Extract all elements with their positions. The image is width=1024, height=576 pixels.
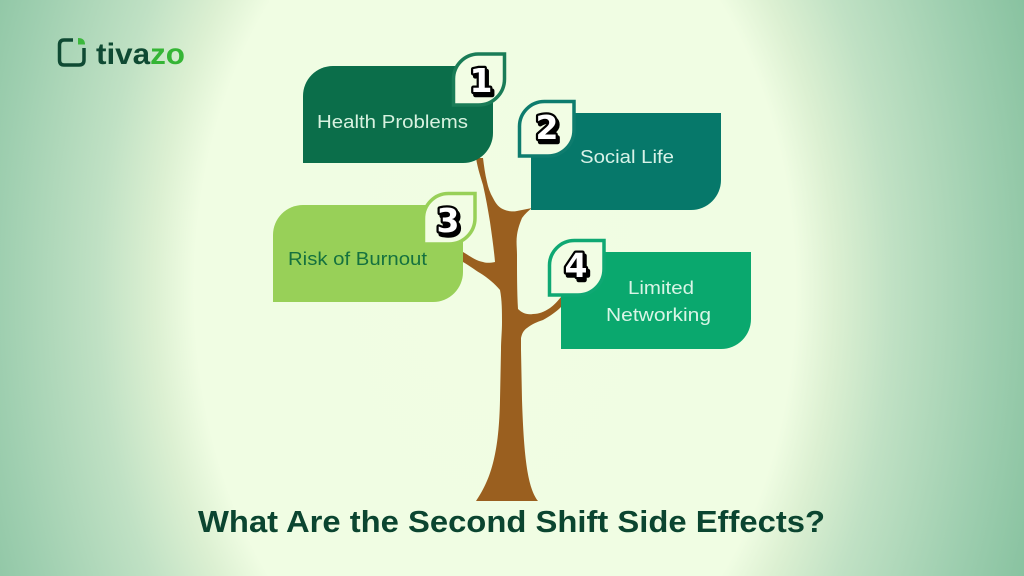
logo wordmark: tivazo (96, 38, 185, 71)
number 1: 1 (472, 64, 494, 103)
panel: Social Life (519, 101, 721, 210)
label: Risk of Burnout: Risk of Burnout (288, 249, 427, 269)
leaf badge 4 (549, 240, 604, 295)
card 3 (273, 205, 463, 302)
number 3: 3 (437, 201, 459, 240)
number 2: 2 (538, 111, 560, 150)
label: Health Problems: Health Problems (317, 112, 468, 132)
number 4: 4 (567, 249, 589, 288)
title: What Are the Second Shift Side Effects? (198, 504, 825, 539)
number 4: 4 (565, 246, 587, 285)
panel: Limited Networking (549, 240, 751, 349)
tree trunk and branches (463, 158, 561, 501)
panel: Health Problems (303, 54, 504, 163)
card 4 (561, 252, 751, 349)
number 1: 1 (470, 61, 492, 100)
card 1 (303, 66, 493, 163)
label: Limited Networking (606, 278, 711, 325)
number 2: 2 (536, 108, 558, 147)
label: Limited Networking: Limited (628, 278, 694, 298)
card 2 (531, 113, 721, 210)
icon: logo square (60, 38, 85, 65)
label: Social Life: Social Life (580, 147, 674, 167)
number 3: 3 (439, 204, 461, 243)
leaf badge 2 (519, 101, 574, 156)
label: Limited Networking: Networking (606, 305, 711, 325)
leaf badge 1 (454, 54, 504, 105)
panel: Risk of Burnout (273, 193, 475, 302)
logo: tivazo (60, 38, 185, 71)
leaf badge 3 (423, 193, 475, 244)
